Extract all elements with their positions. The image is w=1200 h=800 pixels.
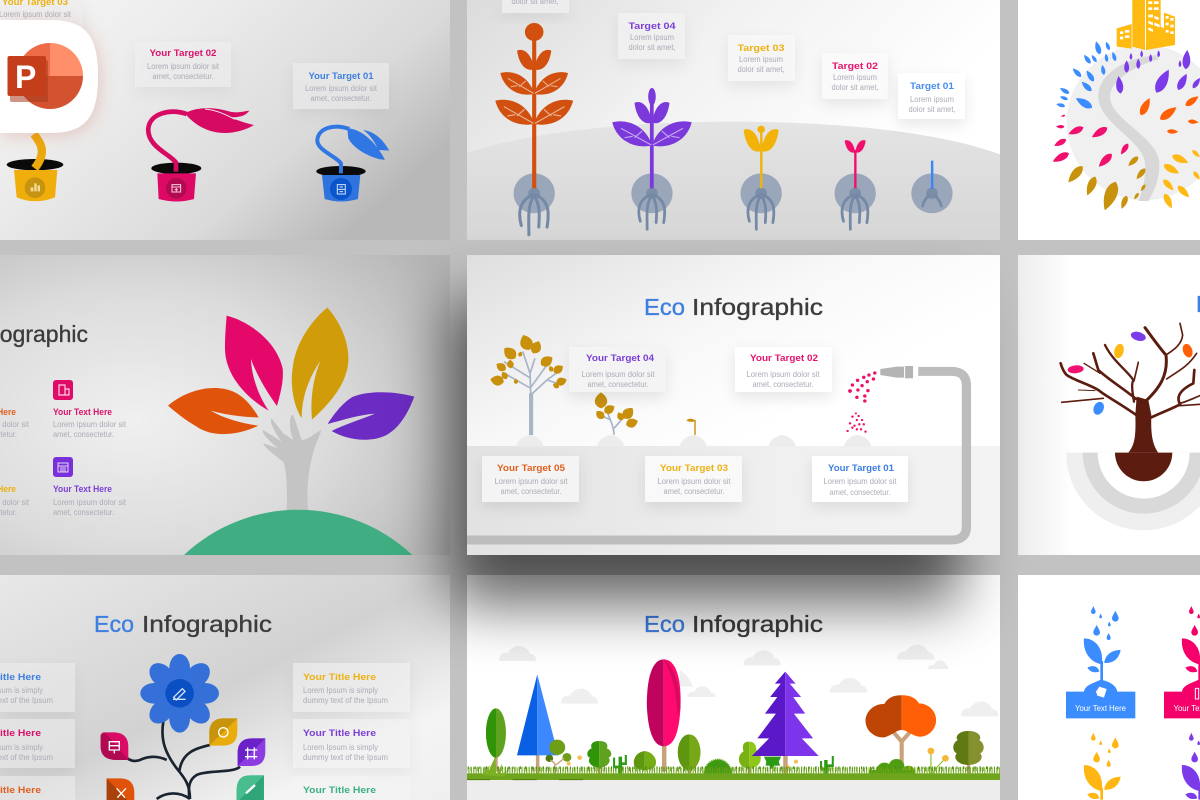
flowers [567, 748, 949, 775]
card: right purple: Your Title Here [303, 728, 376, 739]
green hill [184, 510, 412, 555]
card: your target 01: Your Target 01 [828, 463, 895, 474]
card: target 01: Lorem ipsum [910, 95, 954, 104]
icon: pink box [53, 380, 73, 400]
leaf icon: orange [107, 778, 134, 800]
panel: growth stages slide [467, 0, 1000, 240]
card: your target 04 [569, 347, 666, 392]
unit: yellow plant [1084, 733, 1121, 800]
text: pink item: Your Text Here [53, 407, 112, 418]
tree: olive cloud [953, 731, 984, 775]
card: target 04: dolor sit amet, [628, 43, 676, 52]
card: right yellow [293, 663, 410, 712]
icon: buildings [1117, 0, 1175, 50]
card: partial top [502, 0, 569, 13]
card: your target 02: amet, consectetur. [152, 72, 214, 81]
card: right yellow: Your Title Here [303, 672, 376, 683]
card: your target 01 [812, 456, 908, 502]
unit: purple plant [1182, 732, 1200, 800]
card: target 02: Lorem ipsum [833, 73, 877, 82]
card: target 02: dolor sit amet, [832, 83, 878, 92]
card: your target 02: amet, consectetur. [752, 380, 814, 389]
card: your target 01: amet, consectetur. [830, 488, 890, 497]
card: your target 02: Lorem ipsum dolor sit [746, 370, 820, 379]
card: target 04: Target 04 [628, 21, 676, 32]
tree: olive oval [678, 734, 701, 775]
tree: green oval [486, 708, 506, 772]
card: target 01 [898, 73, 965, 119]
unit: pink plant [1164, 606, 1200, 718]
text: pink item: Lorem ipsum dolor sit [53, 420, 127, 429]
panel: hose watering slide [467, 255, 1000, 555]
tree: orange [866, 695, 936, 775]
leaves: blue [1056, 41, 1118, 113]
card: your target 01: Lorem ipsum dolor sit [824, 477, 897, 486]
card: target 02 [822, 53, 888, 99]
leaves: yellow [1159, 148, 1200, 210]
panel: rain plant cards slide [1018, 575, 1200, 800]
card: target 03: Lorem ipsum [739, 55, 783, 64]
heading: eco infographic: Eco [94, 611, 134, 637]
card: target 03 [728, 35, 795, 81]
card: left blue [0, 663, 75, 712]
tree: small sapling [594, 392, 639, 435]
card: right green: Your Title Here [303, 785, 376, 796]
leaf icon: purple [238, 738, 265, 766]
bush: green [587, 741, 611, 775]
panel: hand tree slide [0, 255, 450, 555]
flower [140, 654, 219, 733]
grass [466, 757, 1006, 780]
tree: purple pine [752, 672, 819, 775]
card: your target 01: Your Target 01 [308, 71, 374, 82]
text: purple item: Lorem ipsum dolor sit [53, 498, 127, 507]
pink potted plant [148, 108, 254, 201]
leaf: yellow [292, 308, 348, 420]
text: yellow item [0, 484, 30, 517]
heading: eco infographic [94, 611, 272, 637]
bush: spiky dome [704, 759, 732, 777]
leaf icon: green [237, 775, 264, 800]
leaf: pink [225, 316, 283, 411]
card: your target 03: Your Target 03 [660, 463, 728, 474]
card: target 01: dolor sit amet, [908, 105, 956, 114]
card: your target 01: amet, consectetur. [310, 94, 372, 103]
circle and road [1067, 45, 1200, 201]
unit: blue plant: Your Text Here [1075, 703, 1126, 713]
card: your target 03: Lorem ipsum dolor sit [0, 10, 72, 19]
yellow potted plant [7, 134, 63, 201]
card: right yellow: dummy text of the Ipsum [303, 696, 388, 705]
text: purple item [53, 484, 127, 517]
leaves: pink [1051, 114, 1131, 169]
heading: eco infographic: Eco [644, 294, 685, 320]
tree: large with gold leaves [489, 333, 568, 435]
text: purple item: Your Text Here [53, 484, 112, 495]
bush: olive dome [634, 751, 656, 770]
plant: purple stage 4 [612, 88, 692, 229]
card: your target 05 [482, 456, 579, 502]
leaf icon: yellow [209, 718, 237, 746]
card: your target 01 [293, 63, 389, 109]
heading: eco infographic: Infographic [692, 611, 823, 637]
panel: potted plants slide [0, 0, 450, 240]
card: your target 02 [735, 347, 832, 392]
card: your target 04: Lorem ipsum dolor sit [582, 370, 655, 379]
hose nozzle [880, 366, 913, 378]
plant: blue stage 1 [911, 161, 953, 213]
card: your target 02: Your Target 02 [150, 48, 216, 59]
cactus [613, 755, 627, 775]
icon: powerpoint badge: P [15, 59, 36, 95]
text: pink item: amet, consectetur. [53, 430, 114, 439]
card: left pink [0, 719, 75, 768]
card: your target 05: Your Target 05 [497, 463, 566, 474]
heading: eco infographic: Eco [644, 611, 685, 637]
hose [466, 371, 966, 540]
card: target 04: Lorem ipsum [630, 33, 674, 42]
card: your target 01: Lorem ipsum dolor sit [305, 84, 378, 93]
leaves: gold [1065, 153, 1149, 212]
panel: city leaves slide [1018, 0, 1200, 240]
plant: orange stage 5 [495, 23, 573, 235]
card: right purple: dummy text of the Ipsum [303, 753, 388, 762]
text: pink item [53, 407, 127, 439]
hand tree trunk [263, 415, 322, 513]
card: right yellow: Lorem Ipsum is simply [303, 686, 378, 695]
card: your target 02: Lorem ipsum dolor sit [147, 62, 220, 71]
black stems [126, 722, 240, 799]
card: target 03: Target 03 [738, 43, 784, 54]
card: your target 02: Your Target 02 [750, 353, 818, 364]
leaf icon: pink [101, 732, 128, 760]
tree: small round [546, 740, 571, 775]
icon: purple box [53, 457, 73, 477]
card: right purple [293, 719, 410, 768]
water drops [846, 371, 877, 433]
heading: eco infographic [644, 294, 823, 320]
card: your target 04: amet, consectetur. [588, 380, 648, 389]
leaf: purple [328, 392, 414, 440]
plant: yellow stage 3 [740, 126, 782, 229]
leaves: orange [1136, 94, 1200, 134]
ground arcs [1066, 453, 1200, 530]
text: purple item: amet, consectetur. [53, 508, 114, 517]
tree: pink oval [647, 659, 681, 772]
plant: pink stage 2 [835, 140, 876, 229]
cactus [820, 756, 834, 777]
card: target 03: dolor sit amet, [738, 65, 784, 74]
card: your target 05: amet, consectetur. [500, 487, 562, 496]
text: orange item [0, 407, 30, 439]
leaves: purple [1115, 50, 1200, 99]
unit: blue plant [1066, 606, 1135, 718]
card: right purple: Lorem Ipsum is simply [303, 743, 378, 752]
bare tree [1061, 323, 1200, 481]
heading: eco infographic: Infographic [142, 611, 272, 637]
tree: blue triangle [517, 674, 558, 775]
blue potted plant [316, 127, 389, 201]
card: target 01: Target 01 [910, 81, 955, 92]
card: left orange [0, 776, 75, 800]
bush: dark star [764, 757, 781, 769]
card: your target 03: amet, consectetur. [664, 487, 724, 496]
bush: lime [739, 742, 761, 775]
heading: eco infographic: Infographic [692, 294, 823, 320]
heading: eco infographic [644, 611, 823, 637]
card: your target 03: Lorem ipsum dolor sit [658, 477, 731, 486]
bushes: right green [869, 759, 915, 778]
soil mounds [516, 435, 871, 447]
card: your target 04: Your Target 04 [586, 353, 655, 364]
card: your target 03 [0, 0, 83, 30]
card: target 04 [618, 13, 685, 59]
card: your target 05: Lorem ipsum dolor sit [494, 477, 568, 486]
leaves: tree [1067, 330, 1194, 416]
center panel shadow [450, 300, 960, 605]
panel: flower tree slide [0, 575, 450, 800]
card: your target 03 [645, 456, 742, 502]
card: right green [293, 776, 410, 800]
leaf: orange [168, 388, 259, 434]
card: target 02: Target 02 [832, 61, 878, 72]
card: your target 02 [135, 42, 231, 87]
panel: tree with roots slide [1018, 255, 1200, 555]
panel: forest slide [467, 575, 1000, 800]
icon: powerpoint badge [0, 20, 98, 133]
clouds [499, 645, 998, 716]
sprout [686, 419, 696, 435]
